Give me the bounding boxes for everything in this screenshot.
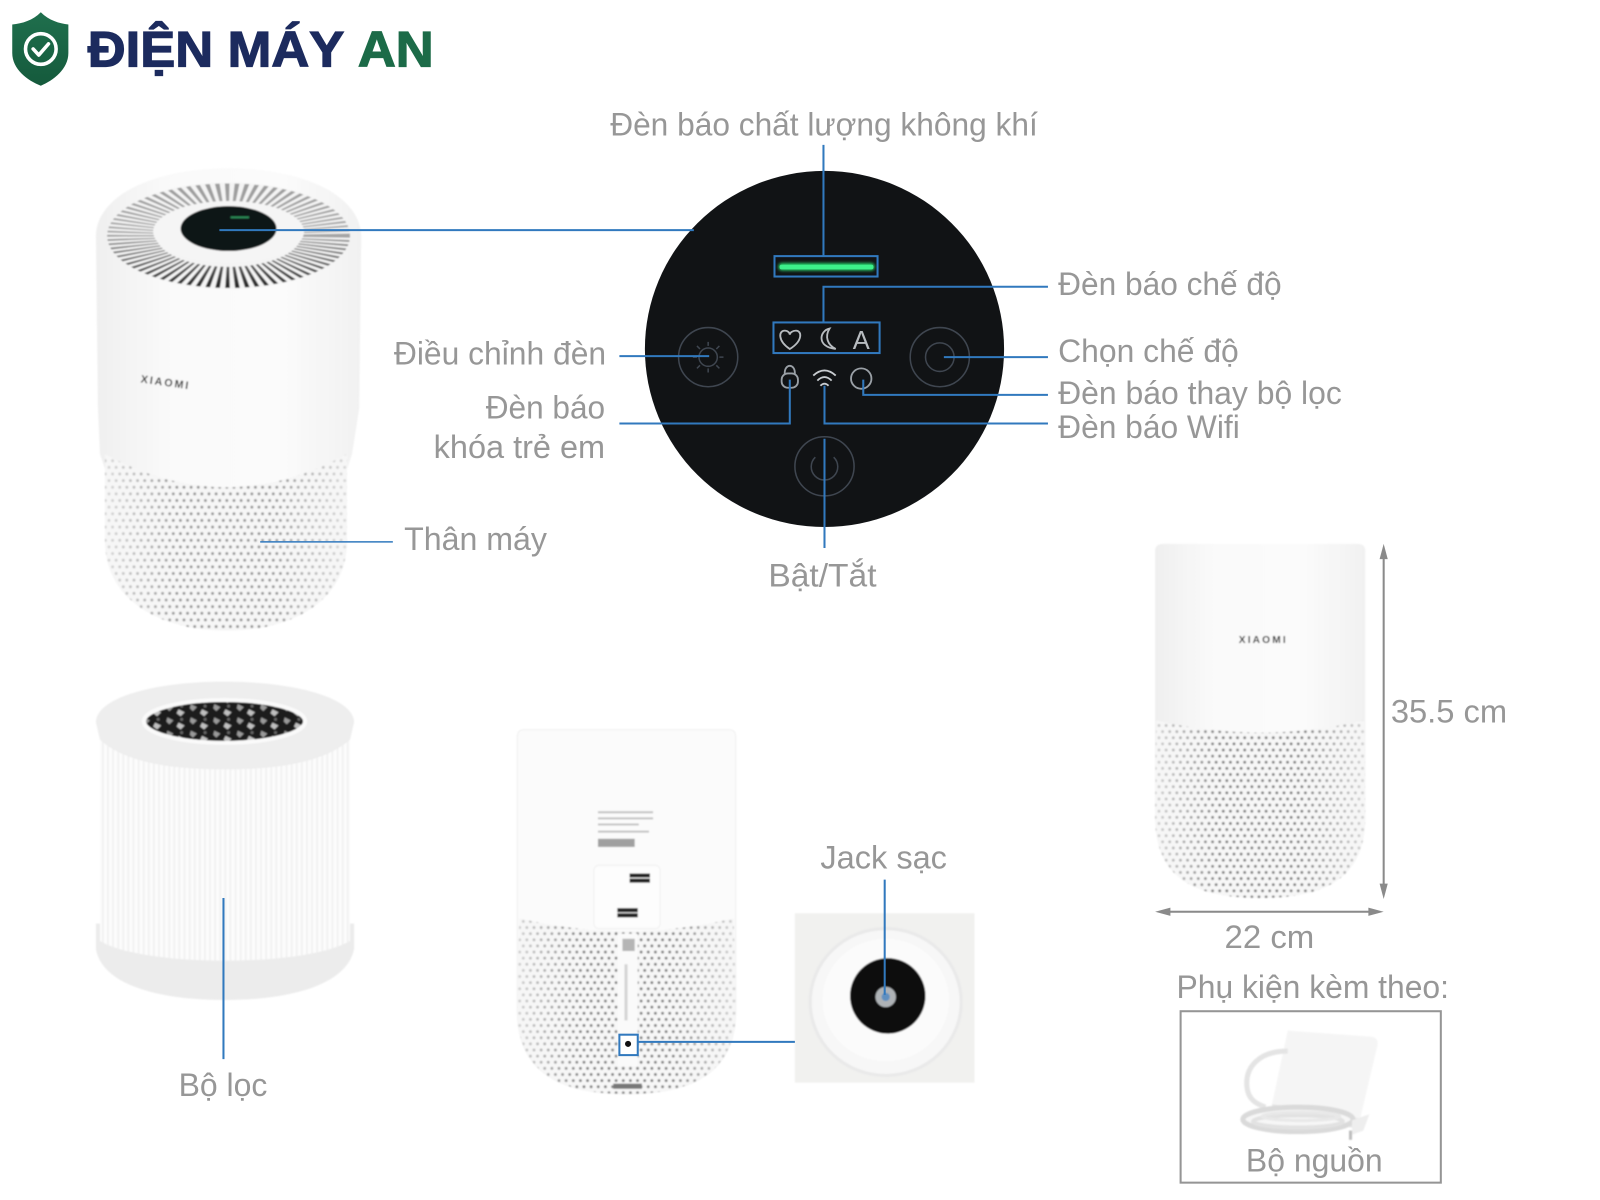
label: child lock indicator — [434, 388, 605, 465]
product: purifier front view — [96, 168, 361, 633]
icon: auto mode: A — [853, 327, 870, 355]
callout lines — [219, 145, 1048, 1059]
top air grill — [107, 183, 350, 289]
label: power: Bật/Tắt — [768, 557, 877, 594]
arrow: height — [1380, 544, 1388, 899]
label: width value: 22 cm — [1224, 918, 1314, 955]
rear centre strip — [617, 934, 638, 1066]
label: wifi indicator: Đèn báo Wifi — [1058, 408, 1240, 445]
filter bottom band — [96, 923, 354, 1000]
label: power adapter: Bộ nguồn — [1246, 1141, 1383, 1178]
top control panel — [181, 206, 277, 251]
icon: brightness button — [679, 328, 738, 387]
label: mode select: Chọn chế độ — [1058, 332, 1239, 369]
product: purifier rear view — [517, 730, 736, 1097]
label: air quality indicator: Đèn báo chất lượng không khí — [610, 106, 1038, 143]
icon: heart mode — [780, 331, 800, 349]
icon: wifi — [813, 370, 836, 386]
brand text: XIAOMI — [1239, 635, 1286, 646]
arrow: width — [1155, 908, 1384, 916]
icon: sleep moon mode — [822, 329, 836, 349]
brand text: XIAOMI — [140, 373, 189, 392]
panel: accessories box — [1181, 1011, 1441, 1183]
jack marker — [619, 1035, 638, 1055]
icon: power button — [795, 437, 854, 496]
label: accessories heading: Phụ kiện kèm theo: — [1177, 968, 1449, 1005]
power adapter image — [1243, 1031, 1378, 1140]
rear bottom mark — [613, 1084, 642, 1089]
label: child lock indicator: khóa trẻ em — [434, 428, 605, 465]
icon: green shield with check — [12, 12, 68, 86]
panel: control panel zoom circle — [645, 171, 1004, 527]
panel: charging jack closeup — [795, 913, 974, 1083]
filter top ring — [96, 682, 354, 769]
label: mode indicator: Đèn báo chế độ — [1058, 265, 1282, 302]
filter carbon opening — [144, 700, 305, 743]
air quality light bar — [779, 263, 874, 270]
label: child lock indicator: Đèn báo — [486, 388, 605, 425]
icon: filter indicator — [851, 368, 871, 389]
icon: child lock — [782, 366, 798, 388]
label: body: Thân máy — [404, 520, 548, 557]
label: filter: Bộ lọc — [179, 1066, 267, 1103]
product: filter — [96, 682, 354, 1000]
icon: mode select button — [910, 328, 969, 387]
filter pleated body — [100, 735, 350, 961]
logo: Điện Máy An — [12, 12, 434, 86]
label: filter replacement indicator: Đèn báo thay bộ lọc — [1058, 374, 1342, 411]
label: height value: 35.5 cm — [1391, 692, 1507, 729]
label: brightness adjustment: Điều chỉnh đèn — [394, 334, 606, 371]
logo wordmark: ĐIỆN MÁY AN — [88, 21, 434, 77]
label: charging jack: Jack sạc — [820, 838, 947, 875]
rear handle panel — [594, 865, 660, 929]
product: purifier dimensions view — [1155, 544, 1365, 898]
rear spec label — [598, 811, 653, 847]
